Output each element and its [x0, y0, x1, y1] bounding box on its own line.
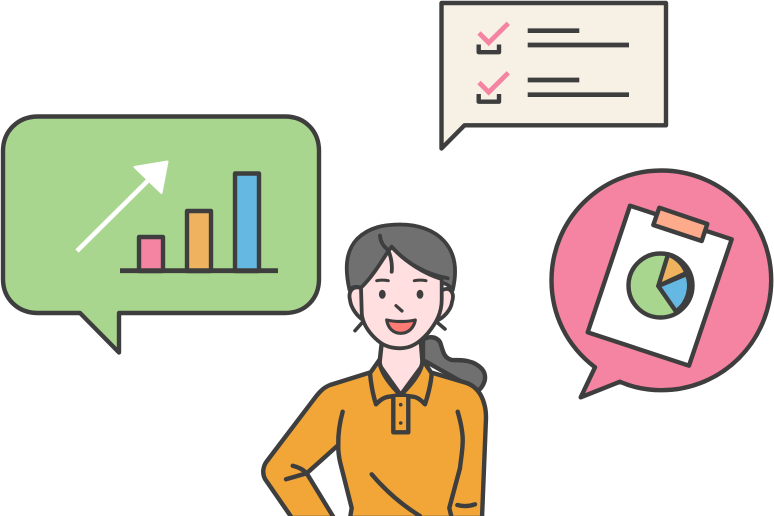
- bubble shape: [442, 3, 666, 148]
- ears: [349, 287, 453, 320]
- panel: checklist speech bubble: [442, 3, 666, 148]
- clipboard clip: [653, 208, 707, 241]
- neck: [379, 340, 423, 395]
- hair back: [347, 224, 455, 290]
- bubble shape: [3, 116, 319, 352]
- pie chart: [628, 254, 692, 318]
- icon: rising arrow: [77, 162, 168, 251]
- bubble shape: [552, 170, 771, 397]
- icon: second checkbox: [479, 73, 508, 102]
- panel: green speech bubble with growth chart: [3, 116, 319, 352]
- person: [263, 224, 486, 516]
- shirt creases: [286, 412, 475, 516]
- text lines: first item: [528, 31, 629, 45]
- collar: [370, 360, 432, 404]
- eyes: [379, 290, 423, 299]
- ponytail: [423, 337, 485, 391]
- nose: [396, 306, 402, 311]
- icon: first checkbox: [479, 23, 508, 52]
- eyebrows: [377, 279, 426, 282]
- face: [361, 247, 442, 348]
- text lines: second item: [528, 80, 629, 95]
- placket: [393, 397, 408, 432]
- bar chart: [120, 174, 278, 271]
- mouth: [387, 320, 415, 333]
- panel: pink speech bubble with clipboard: [552, 170, 771, 397]
- hair strands: [380, 236, 448, 278]
- shirt: [263, 372, 486, 516]
- ear ticks: [355, 322, 445, 331]
- clipboard sheet: [588, 206, 732, 366]
